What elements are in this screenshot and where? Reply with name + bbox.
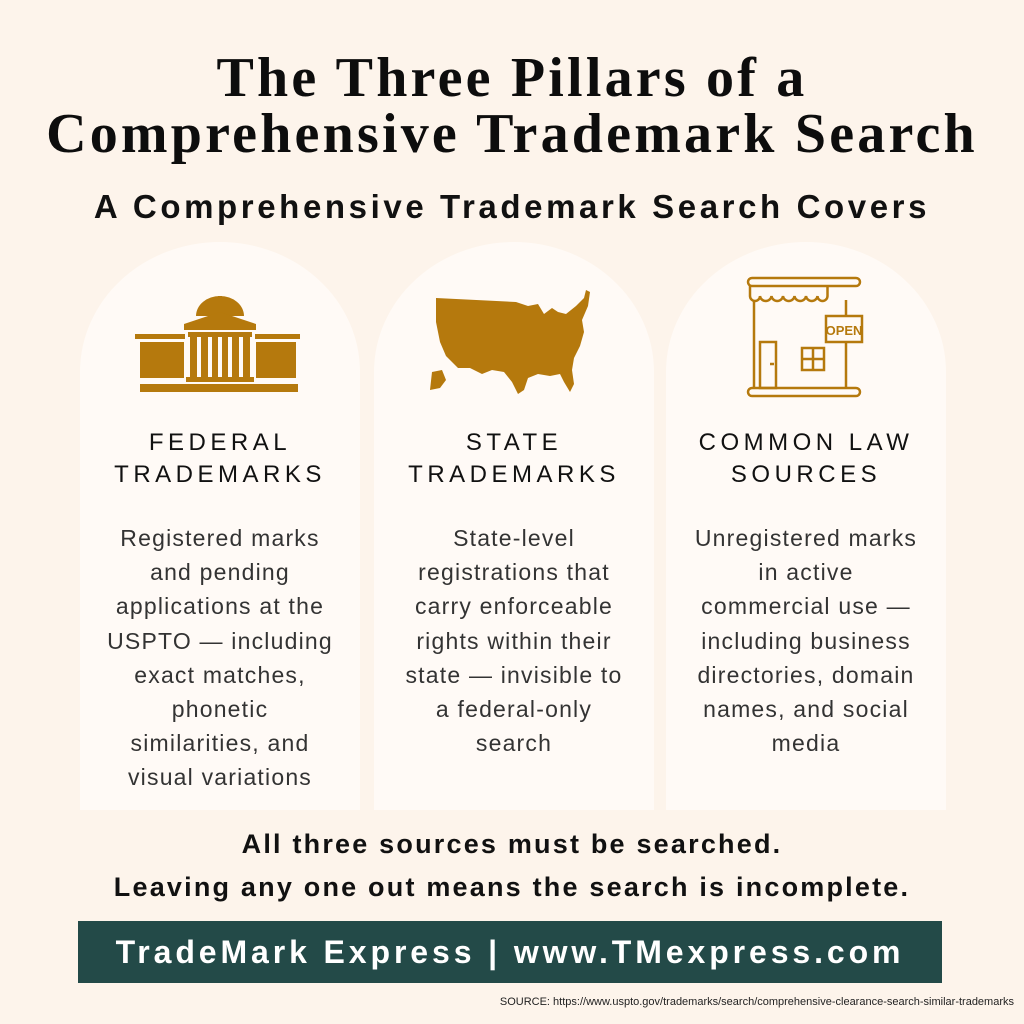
text: Unregistered marks in active commercial use — including business directories, domain names, and social media	[695, 525, 917, 756]
footer statement: All three sources must be searched.	[242, 829, 782, 859]
footer statement	[114, 829, 910, 902]
heading: TRADEMARKS	[408, 461, 620, 488]
subtitle: A Comprehensive Trademark Search Covers	[94, 188, 930, 225]
icon: capitol building	[135, 296, 300, 392]
panel: federal	[80, 242, 360, 810]
text: Registered marks and pending applications at the USPTO — including exact matches, phonetic similarities, and visual variations	[107, 525, 333, 790]
heading: STATE	[466, 429, 562, 456]
heading: TRADEMARKS	[114, 461, 326, 488]
heading	[114, 429, 326, 488]
icon: storefront: OPEN	[826, 323, 862, 338]
panel: state	[374, 242, 654, 810]
banner: TradeMark Express | www.TMexpress.com	[116, 934, 904, 970]
heading: SOURCES	[731, 461, 881, 488]
icon: storefront	[746, 276, 864, 398]
heading: COMMON LAW	[699, 429, 913, 456]
source: SOURCE: https://www.uspto.gov/trademarks/search/comprehensive-clearance-search-similar-trademarks	[500, 996, 1014, 1008]
heading	[699, 429, 913, 488]
heading: FEDERAL	[149, 429, 291, 456]
icon: US map	[430, 290, 590, 394]
title: The Three Pillars of a	[216, 47, 807, 109]
banner	[78, 921, 942, 983]
text: State-level registrations that carry enforceable rights within their state — invisible to a federal-only search	[405, 525, 623, 756]
panel: common law	[666, 242, 946, 810]
title: Comprehensive Trademark Search	[46, 103, 978, 165]
footer statement: Leaving any one out means the search is incomplete.	[114, 872, 910, 902]
title	[46, 47, 978, 165]
heading	[408, 429, 620, 488]
